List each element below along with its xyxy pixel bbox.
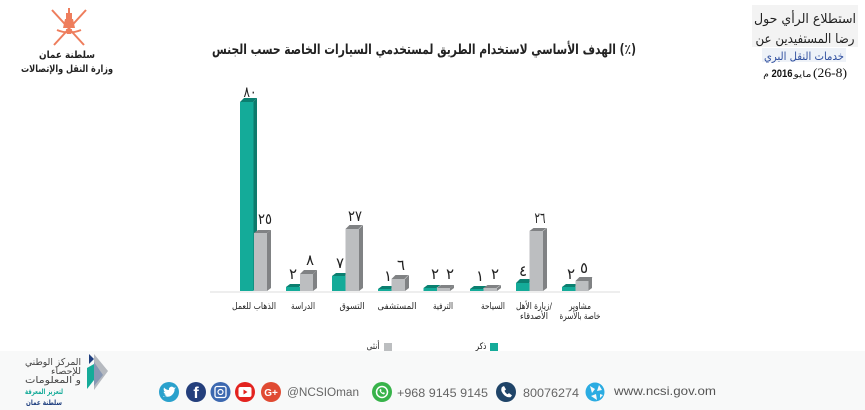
logo: ministry emblem and name: سلطنة عمان bbox=[39, 50, 95, 61]
legend: ذكر bbox=[475, 342, 486, 352]
logo: ministry emblem and name: وزارة النقل والإتصالات bbox=[21, 64, 113, 75]
title: الهدف الأساسي لاستخدام الطريق لمستخدمي السيارات الخاصة حسب الجنس (٪) bbox=[212, 41, 636, 58]
group: work: ٢٥ bbox=[258, 210, 272, 228]
group: hospital: ١ bbox=[384, 267, 392, 285]
group: family errands: ٢ bbox=[567, 265, 575, 283]
group: work: ٨٠ bbox=[244, 83, 256, 101]
legend: أنثى bbox=[366, 340, 380, 352]
group: visiting family: ٤ bbox=[519, 262, 527, 280]
group: visiting family bbox=[516, 209, 553, 322]
logo: NCSI: سلطنة عمان bbox=[26, 398, 62, 407]
group: shopping: ٧ bbox=[336, 254, 344, 272]
survey heading block: مايو bbox=[792, 70, 812, 80]
group: family errands bbox=[560, 259, 600, 322]
logo: NCSI: لتعزيز المعرفة bbox=[25, 387, 63, 396]
icon: google plus bbox=[261, 382, 281, 402]
icon: twitter bbox=[159, 382, 179, 402]
group: hospital: ٦ bbox=[397, 256, 405, 274]
group: family errands: خاصة بالأسرة bbox=[560, 310, 600, 322]
website: www.ncsi.gov.om bbox=[613, 384, 716, 398]
whatsapp number: +968 9145 9145 bbox=[397, 386, 488, 400]
group: leisure: ٢ bbox=[431, 265, 439, 283]
icon: youtube bbox=[235, 382, 255, 402]
phone number: 80076274 bbox=[523, 386, 579, 400]
group: visiting family: زيارة الأهل/ bbox=[516, 300, 553, 312]
icon: facebook: f bbox=[193, 385, 199, 402]
group: shopping: التسوق bbox=[340, 302, 364, 312]
group: tourism: ١ bbox=[476, 267, 484, 285]
group: shopping bbox=[332, 207, 364, 312]
survey heading block: خدمات النقل البري bbox=[764, 49, 844, 64]
group: study: ٢ bbox=[289, 265, 297, 283]
group: study bbox=[286, 251, 317, 312]
group: leisure: الترفية bbox=[433, 302, 453, 312]
bar chart bbox=[210, 83, 620, 322]
group: family errands: ٥ bbox=[580, 259, 588, 277]
icon: Oman emblem bbox=[52, 8, 86, 45]
icon: google plus: G+ bbox=[264, 388, 278, 399]
icon: globe bbox=[586, 382, 604, 402]
group: hospital bbox=[378, 256, 416, 312]
logo: NCSI: للإحصاء bbox=[51, 367, 81, 377]
icon: instagram bbox=[210, 382, 230, 402]
survey heading block: استطلاع الرأي حول bbox=[754, 10, 856, 27]
icon: phone bbox=[496, 382, 516, 402]
group: work: الذهاب للعمل bbox=[232, 302, 276, 312]
group: tourism bbox=[470, 265, 505, 312]
logo: NCSI: المركز الوطني bbox=[25, 357, 81, 368]
group: visiting family: الأصدقاء bbox=[520, 310, 548, 322]
group: study: ٨ bbox=[306, 251, 314, 269]
legend bbox=[366, 340, 498, 352]
group: leisure: ٢ bbox=[446, 265, 454, 283]
survey heading block: م bbox=[763, 70, 769, 80]
icon: whatsapp bbox=[372, 382, 392, 402]
group: tourism: ٢ bbox=[491, 265, 499, 283]
footer band bbox=[0, 351, 865, 410]
logo: NCSI: و المعلومات bbox=[25, 375, 81, 386]
group: study: الدراسة bbox=[291, 302, 315, 312]
icon: NCSI mark bbox=[87, 354, 108, 390]
twitter handle: @NCSIOman bbox=[287, 387, 359, 399]
group: shopping: ٢٧ bbox=[348, 207, 362, 225]
survey heading block: 2016 bbox=[772, 68, 792, 80]
logo: NCSI bbox=[25, 354, 108, 407]
group: visiting family: ٢٦ bbox=[534, 209, 546, 227]
group: work bbox=[232, 83, 276, 312]
survey heading block: (26-8) bbox=[813, 66, 847, 80]
survey heading block: رضا المستفيدين عن bbox=[756, 32, 854, 47]
survey heading block bbox=[752, 5, 858, 80]
logo: ministry emblem and name bbox=[21, 8, 113, 75]
group: leisure bbox=[424, 265, 454, 312]
group: family errands: مشاوير bbox=[568, 302, 591, 312]
group: tourism: السياحة bbox=[481, 302, 505, 312]
icon: facebook bbox=[186, 382, 206, 402]
group: hospital: المستشفى bbox=[378, 302, 416, 312]
